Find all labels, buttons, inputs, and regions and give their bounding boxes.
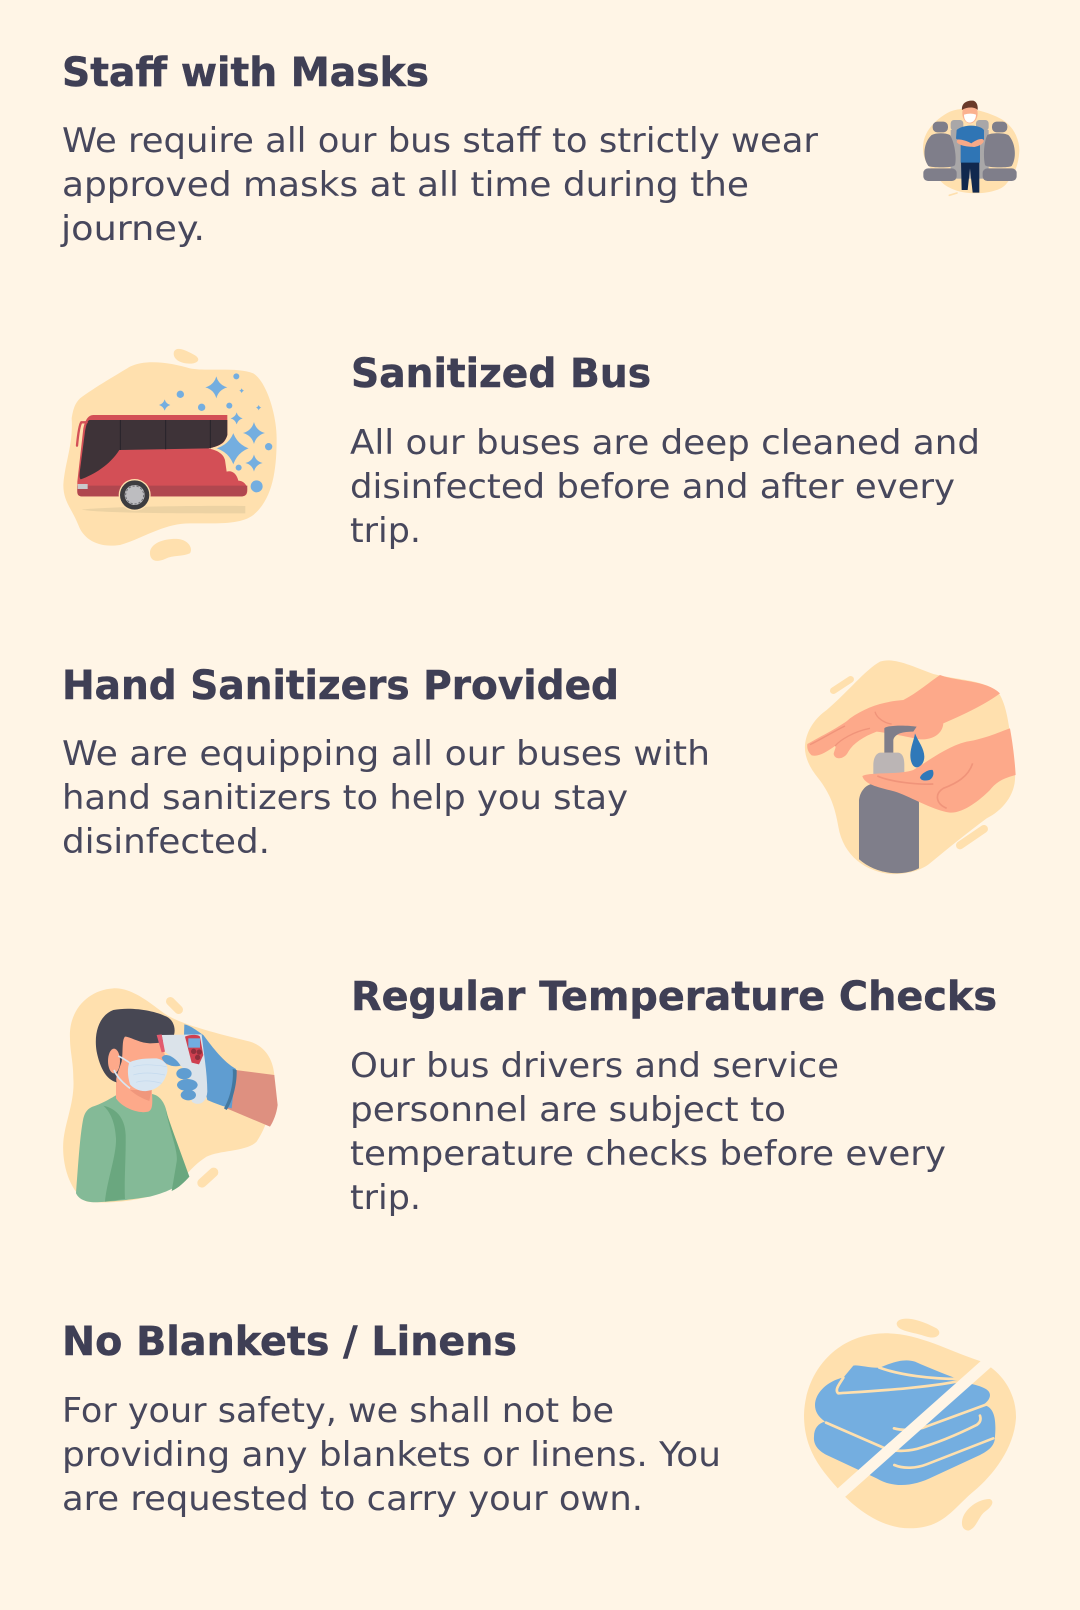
- panel: staff with masks: [60, 50, 1019, 249]
- icon: folded blankets crossed out: [804, 1319, 1016, 1531]
- icon: temperature check on masked man: [63, 988, 278, 1202]
- text block: hand sanitizers provided: We are equipping all our buses with: [62, 734, 710, 774]
- text block: hand sanitizers provided: [62, 734, 710, 862]
- heading: no blankets / linens: No Blankets / Linens: [62, 1319, 517, 1365]
- text block: sanitized bus: disinfected before and after every: [350, 467, 955, 507]
- panel: hand sanitizers provided: [62, 660, 1016, 874]
- heading: staff with masks: Staff with Masks: [62, 50, 429, 96]
- panel: no blankets / linens: [62, 1319, 1016, 1531]
- text block: hand sanitizers provided: disinfected.: [62, 822, 270, 862]
- text block: hand sanitizers provided: hand sanitizers to help you stay: [62, 778, 628, 818]
- man in mask: [76, 1009, 189, 1202]
- text block: sanitized bus: [350, 423, 980, 551]
- text block: staff with masks: We require all our bus staff to strictly wear: [62, 121, 818, 161]
- bus: [77, 415, 247, 511]
- text block: sanitized bus: trip.: [350, 511, 421, 551]
- text block: no blankets / linens: are requested to carry your own.: [62, 1479, 643, 1519]
- text block: sanitized bus: All our buses are deep cleaned and: [350, 423, 980, 463]
- panel: sanitized bus: [63, 349, 980, 561]
- heading: hand sanitizers provided: Hand Sanitizers Provided: [62, 663, 619, 709]
- heading: regular temperature checks: Regular Temperature Checks: [351, 974, 997, 1020]
- icon: hands using sanitizer pump bottle: [805, 660, 1016, 874]
- text block: no blankets / linens: For your safety, we shall not be: [62, 1391, 614, 1431]
- text block: staff with masks: journey.: [60, 209, 205, 249]
- text block: regular temperature checks: [350, 1046, 946, 1218]
- text block: no blankets / linens: [62, 1391, 721, 1519]
- panel: regular temperature checks: [63, 974, 997, 1218]
- text block: no blankets / linens: providing any blankets or linens. You: [62, 1435, 721, 1475]
- text block: regular temperature checks: Our bus drivers and service: [350, 1046, 839, 1086]
- text block: regular temperature checks: temperature checks before every: [350, 1134, 946, 1174]
- text block: staff with masks: approved masks at all time during the: [62, 165, 749, 205]
- arm with gloved hand and thermometer: [157, 1024, 278, 1127]
- text block: staff with masks: [60, 121, 818, 249]
- crossing slash: [835, 1359, 992, 1498]
- text block: regular temperature checks: trip.: [350, 1178, 421, 1218]
- sparkles: [159, 373, 272, 492]
- text block: regular temperature checks: personnel are subject to: [350, 1090, 786, 1130]
- heading: sanitized bus: Sanitized Bus: [351, 351, 651, 397]
- icon: sanitized bus with sparkles: [63, 349, 277, 561]
- icon: staff member in mask between bus seats: [923, 101, 1019, 195]
- figure: staff member: [956, 101, 984, 193]
